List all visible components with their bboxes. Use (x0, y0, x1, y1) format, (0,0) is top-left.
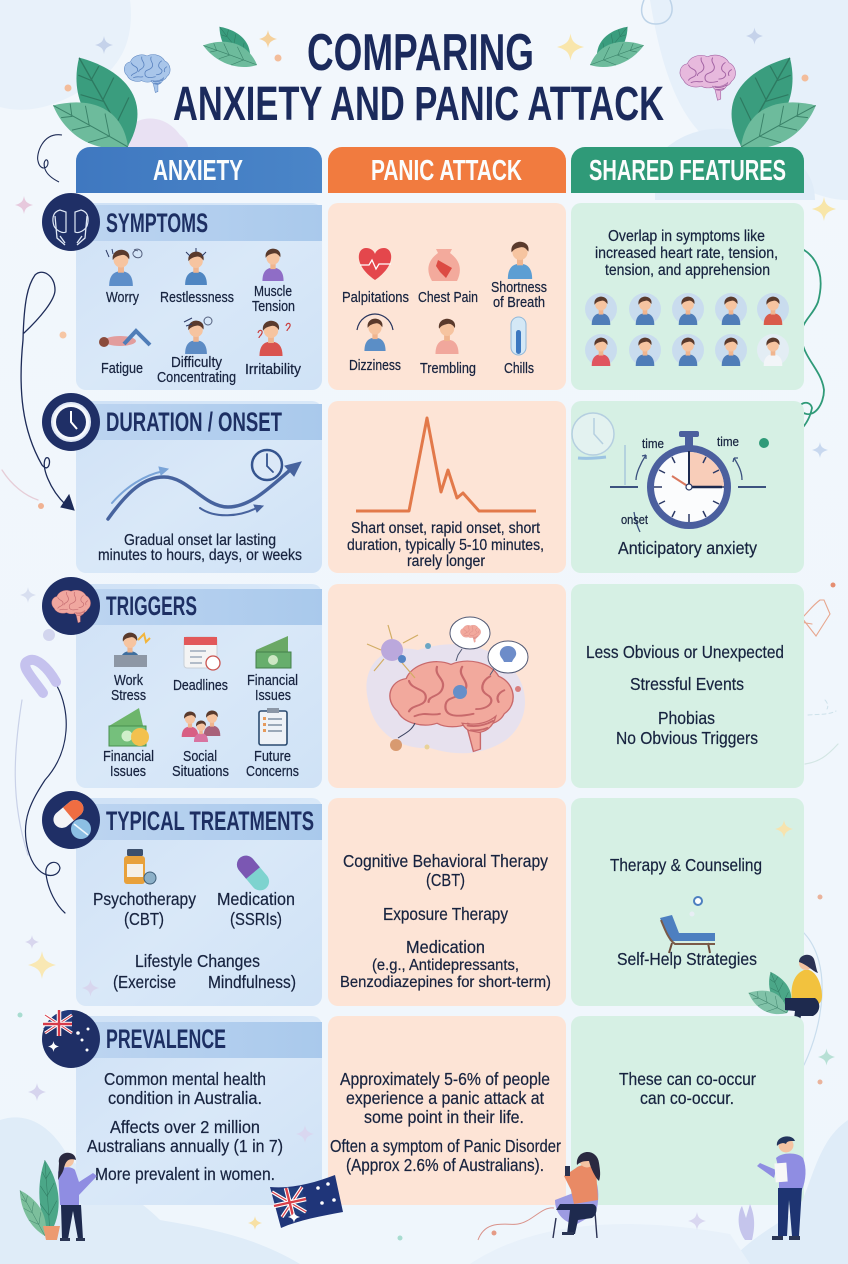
text: approximately: some point in their life. (364, 1107, 524, 1127)
text: phobias and no obvious triggers (616, 708, 758, 748)
illustration: man with paper (739, 1136, 806, 1240)
text: phobias and no obvious triggers: Phobias (658, 708, 715, 728)
label: shortness of breath: Shortness (491, 280, 547, 296)
icon: top right small leaves (586, 19, 647, 76)
label: palpitations: Palpitations (342, 290, 409, 306)
panel: triggers panic attack (328, 584, 566, 788)
panel: treatments anxiety (42, 791, 322, 1006)
text: overlap: tension, and apprehension (605, 262, 770, 279)
text: lifestyle changes: (Exercise (113, 972, 176, 992)
icon: clipboard (259, 708, 287, 745)
text: panic disorder: Often a symptom of Panic Disorder (330, 1136, 561, 1156)
text: panic disorder (330, 1136, 561, 1175)
icon: difficulty concentrating (184, 317, 212, 354)
label: financial issues top (247, 673, 298, 704)
icon: heart (359, 248, 391, 280)
text: medication: (e.g., Antidepressants, (372, 957, 519, 974)
column header: anxiety (76, 147, 322, 193)
text: short onset (347, 520, 544, 570)
icon: calendar (184, 637, 220, 670)
text: co-occur: can co-occur. (640, 1088, 734, 1108)
illustration: seated woman with phone (478, 1152, 600, 1240)
text: short onset: duration, typically 5-10 minutes, (347, 537, 544, 554)
row: symptoms (42, 193, 804, 390)
panel: treatments shared (571, 798, 804, 1006)
icon: muscle tension (262, 249, 284, 281)
label: medication ssris: (SSRIs) (230, 909, 282, 929)
text: self-help strategies: Self-Help Strategies (617, 949, 757, 969)
label: future concerns: Concerns (246, 764, 299, 780)
panel: duration anxiety (42, 393, 322, 573)
illustration: woman with plant (16, 1153, 97, 1241)
panel: prevalence panic attack (328, 1016, 566, 1205)
icon: chest (428, 249, 460, 281)
icon: work stress (114, 633, 150, 667)
text: gradual onset (98, 532, 302, 564)
panel: prevalence anxiety (42, 1010, 322, 1205)
panel: triggers shared (571, 584, 804, 788)
label: financial issues top: Financial (247, 673, 298, 689)
icon: capsule (233, 852, 273, 894)
text: approximately: experience a panic attack at (346, 1088, 544, 1108)
panel: symptoms panic attack (328, 203, 566, 390)
icon: stopwatch (647, 431, 731, 529)
label: future concerns: Future (254, 749, 291, 765)
illustration: seated woman with laptop (745, 955, 822, 1032)
text: lifestyle changes (113, 951, 296, 992)
section band: triggers: TRIGGERS (106, 591, 197, 621)
icon: trembling (435, 319, 459, 354)
text: panic disorder: (Approx 2.6% of Australians). (346, 1155, 544, 1175)
label: deadlines: Deadlines (173, 678, 228, 694)
section band: treatments (42, 791, 322, 849)
text: approximately: Approximately 5-6% of people (340, 1069, 550, 1089)
icon: social group (182, 711, 220, 742)
panel: symptoms shared (571, 203, 804, 390)
panel: treatments panic attack (328, 798, 566, 1006)
text: cbt (343, 851, 548, 890)
title: COMPARING (307, 24, 534, 82)
chart: panic spike (356, 418, 536, 511)
label: muscle tension (252, 284, 295, 315)
text: phobias and no obvious triggers: No Obvious Triggers (616, 728, 758, 748)
thought bubble: lightbulb (488, 641, 528, 675)
label: psychotherapy: (CBT) (124, 909, 164, 929)
label: dizziness: Dizziness (349, 358, 401, 374)
text: lifestyle changes: Mindfulness) (208, 972, 296, 992)
label: work stress: Stress (111, 688, 146, 704)
label: worry: Worry (106, 290, 140, 306)
label: time left: time (642, 436, 664, 451)
label: social situations: Social (183, 749, 217, 765)
decorative sparkles and dots (18, 442, 835, 1240)
row: typical treatments (42, 791, 804, 1006)
label: difficulty concentrating: Concentrating (157, 370, 236, 386)
label: irritability: Irritability (245, 362, 302, 378)
icon: pink brain (680, 55, 735, 100)
label: financial issues bottom (103, 749, 154, 780)
label: medication ssris: Medication (217, 889, 295, 909)
panel: duration panic attack (328, 401, 566, 573)
label: difficulty concentrating (157, 355, 236, 386)
label: medication ssris (217, 889, 295, 929)
icon: blue brain (124, 55, 170, 93)
icons: shared symptoms grid (585, 293, 789, 366)
text: co-occur (619, 1069, 756, 1108)
text: cbt: (CBT) (426, 870, 465, 890)
icon: fatigue (99, 331, 150, 347)
chart: gradual onset curve (108, 450, 301, 519)
section band: prevalence: PREVALENCE (106, 1024, 226, 1054)
title: ANXIETY AND PANIC ATTACK (173, 78, 664, 131)
section band: duration: DURATION / ONSET (106, 407, 282, 437)
row: prevalence (42, 1010, 804, 1205)
decorative curves (2, 250, 838, 1065)
section band: duration (42, 393, 322, 451)
label: trembling: Trembling (420, 361, 476, 377)
decorative leaves and brains around title (15, 0, 836, 338)
panel: triggers anxiety (42, 577, 322, 788)
text: common condition (104, 1069, 266, 1108)
label: psychotherapy: Psychotherapy (93, 889, 196, 909)
text: affects over 2 million (87, 1117, 283, 1156)
text: overlap (595, 228, 778, 279)
text: lifestyle changes: Lifestyle Changes (135, 951, 260, 971)
text: co-occur: These can co-occur (619, 1069, 756, 1089)
label: difficulty concentrating: Difficulty (171, 355, 223, 371)
row: triggers (42, 577, 804, 788)
label: financial issues bottom: Financial (103, 749, 154, 765)
text: short onset: Shart onset, rapid onset, short (351, 520, 541, 537)
text: approximately (340, 1069, 550, 1127)
text: cbt: Cognitive Behavioral Therapy (343, 851, 548, 871)
text: more prevalent: More prevalent in women. (95, 1164, 275, 1184)
text: less obvious: Less Obvious or Unexpected (586, 642, 784, 662)
panel: prevalence shared (571, 1016, 804, 1205)
label: psychotherapy (93, 889, 196, 929)
label: muscle tension: Muscle (254, 284, 292, 300)
label: shortness of breath: of Breath (493, 295, 545, 311)
column header: shared features (571, 147, 804, 193)
section band: treatments: TYPICAL TREATMENTS (106, 806, 314, 836)
row: duration onset (42, 393, 804, 573)
icon: ghost clock (572, 413, 625, 485)
icon: money with coin (109, 708, 149, 746)
text: stressful events: Stressful Events (630, 674, 744, 694)
label: financial issues top: Issues (255, 688, 291, 704)
label: social situations: Situations (172, 764, 229, 780)
text: exposure therapy: Exposure Therapy (383, 904, 508, 924)
label: shortness of breath (491, 280, 547, 311)
section band: symptoms: SYMPTOMS (106, 208, 208, 238)
icon: dizziness (357, 314, 393, 351)
icon: therapy couch (660, 897, 715, 953)
panel: symptoms anxiety (42, 193, 322, 390)
end marker on right curve (759, 438, 769, 448)
label: chest pain: Chest Pain (418, 290, 478, 306)
icon: worry (106, 249, 142, 286)
icon: left large leaves (47, 44, 150, 164)
label: financial issues bottom: Issues (110, 764, 146, 780)
title (173, 24, 664, 131)
section band: prevalence (42, 1010, 322, 1068)
label: muscle tension: Tension (252, 299, 295, 315)
text: gradual onset: Gradual onset lar lasting (124, 532, 276, 549)
illustration: brain with neurons (366, 617, 528, 753)
label: work stress (111, 673, 146, 704)
icon: pill bottle (124, 849, 156, 884)
column header: panic attack (328, 147, 566, 193)
icon: top left small leaves (200, 19, 261, 76)
icon: irritability (258, 321, 290, 356)
text: common condition: condition in Australia. (108, 1088, 262, 1108)
text: affects over 2 million: Australians annually (1 in 7) (87, 1136, 283, 1156)
icon: money (256, 636, 291, 668)
label: chills: Chills (504, 361, 534, 377)
label: work stress: Work (114, 673, 144, 689)
icon: right large leaves (719, 44, 822, 164)
panel: duration shared (571, 401, 804, 573)
text: anticipatory anxiety: Anticipatory anxiety (618, 538, 757, 558)
text: medication (340, 937, 551, 991)
section band: triggers (42, 577, 322, 635)
label: future concerns (246, 749, 299, 780)
text: common condition: Common mental health (104, 1069, 266, 1089)
illustration: australian flag (270, 1175, 343, 1228)
text: therapy and counseling: Therapy & Counseling (610, 855, 762, 875)
section band: symptoms (42, 193, 322, 251)
icon: thermometer (511, 317, 526, 355)
text: short onset: rarely longer (407, 553, 485, 570)
label: social situations (172, 749, 229, 780)
label: time right: time (717, 434, 739, 449)
text: affects over 2 million: Affects over 2 million (110, 1117, 260, 1137)
label: onset: onset (621, 512, 648, 527)
text: medication: Medication (406, 937, 485, 957)
column header: panic attack: PANIC ATTACK (371, 155, 522, 187)
arrows and lines around stopwatch (610, 455, 766, 532)
text: overlap: increased heart rate, tension, (595, 245, 778, 262)
label: fatigue: Fatigue (101, 361, 143, 377)
text: medication: Benzodiazepines for short-term) (340, 974, 551, 991)
thought bubble: brain (450, 617, 490, 661)
column header: anxiety: ANXIETY (153, 155, 243, 187)
label: restlessness: Restlessness (160, 290, 234, 306)
decorative sparkles (15, 0, 836, 338)
icon: shortness of breath (508, 242, 532, 279)
text: gradual onset: minutes to hours, days, or weeks (98, 547, 302, 564)
text: overlap: Overlap in symptoms like (608, 228, 765, 245)
icon: restlessness (185, 248, 207, 285)
